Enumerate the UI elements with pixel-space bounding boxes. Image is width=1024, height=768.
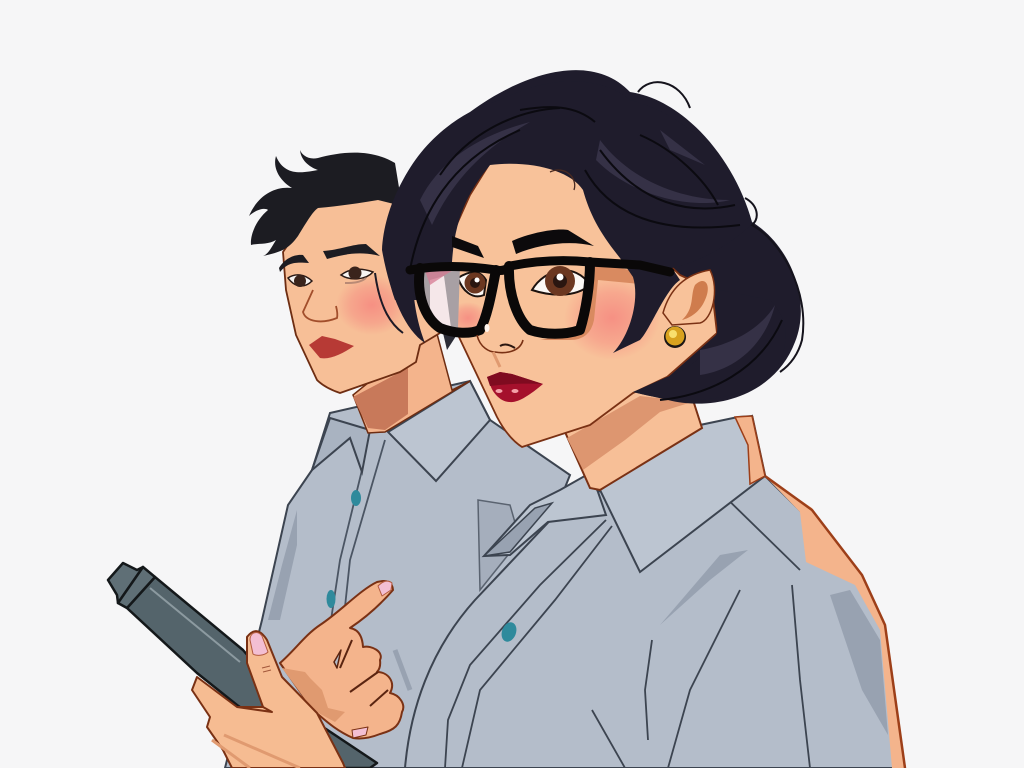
man blush (336, 275, 408, 335)
left collar (484, 473, 606, 556)
neck shadow (353, 368, 408, 430)
nose (477, 324, 523, 367)
man hair lock from woman's side (375, 273, 403, 333)
skin showing at shoulder (765, 476, 905, 768)
left lens reflection (424, 266, 460, 328)
woman neck (565, 380, 702, 490)
eyebrows (452, 230, 594, 258)
man shirt (225, 381, 570, 768)
man nose (303, 290, 337, 321)
woman back hair and bun (386, 70, 801, 404)
button (499, 620, 519, 644)
figure: woman in foreground (382, 70, 905, 768)
dark under-hair by neck (443, 333, 458, 350)
neck shadow (567, 396, 692, 470)
shadow under glasses (540, 262, 640, 340)
woman face (450, 160, 717, 447)
stray hair strands (638, 82, 803, 372)
man face (283, 197, 445, 393)
earring (664, 326, 686, 348)
man lips (309, 336, 354, 358)
woman shirt (405, 416, 905, 768)
glasses (410, 261, 670, 334)
hair highlights (420, 122, 775, 375)
hair strand lines (410, 107, 782, 400)
front hair (382, 81, 752, 353)
skin patch on collar (735, 416, 765, 484)
stray curl on forehead (550, 170, 575, 190)
right eye (532, 266, 590, 296)
man neck (353, 330, 470, 433)
right collar (600, 416, 765, 572)
marker body (108, 563, 377, 768)
man eyebrows (279, 244, 380, 272)
lips (487, 372, 543, 402)
figure: man in background (225, 150, 570, 768)
gripping hand (192, 631, 345, 768)
left eye (458, 272, 486, 296)
hair below ear (633, 290, 786, 400)
man eyes (288, 266, 373, 287)
man hair (249, 150, 402, 256)
figure: hands holding marker (108, 563, 403, 768)
pointing hand (280, 581, 403, 738)
shirt fold lines (445, 488, 810, 768)
cheek blush (564, 276, 660, 360)
ear (663, 270, 715, 325)
